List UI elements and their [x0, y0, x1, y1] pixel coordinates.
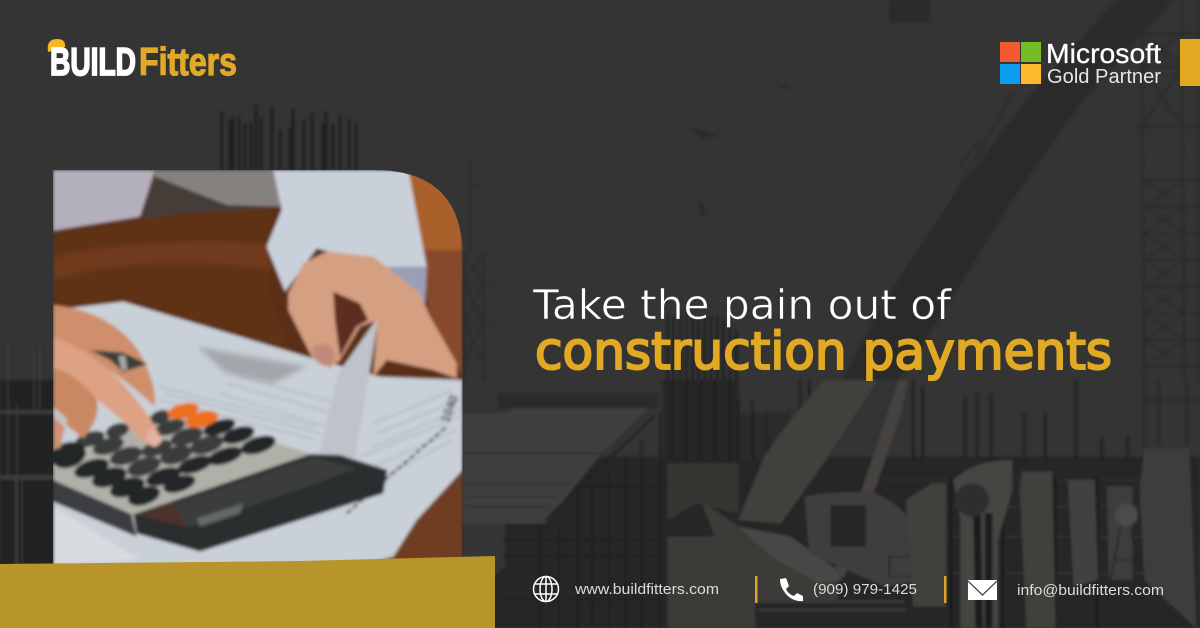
contact bar — [534, 576, 1164, 603]
turned page — [319, 317, 378, 458]
icon: Microsoft squares — [1000, 42, 1041, 84]
badge text: Gold Partner — [1047, 66, 1161, 88]
badge text: Microsoft — [1046, 38, 1161, 69]
left hand — [53, 305, 155, 407]
left building frame — [0, 340, 60, 565]
photo: hands using calculator over tax paperwork — [47, 170, 463, 580]
right lattice tower — [1135, 0, 1200, 380]
wrapped panels — [953, 460, 1012, 628]
heading: Take the pain out of — [532, 281, 953, 329]
paper stack — [53, 302, 463, 580]
rebar above photo — [222, 105, 356, 170]
shirt cuff right — [267, 170, 427, 303]
scaffolding — [502, 380, 1128, 628]
icon: envelope — [968, 580, 997, 600]
yellow band — [0, 556, 495, 628]
divider — [944, 576, 946, 603]
left tower — [460, 163, 495, 380]
calculator keys — [73, 408, 226, 480]
calculator screen — [167, 457, 357, 527]
email: info@buildfitters.com — [1017, 583, 1164, 599]
yellow corner tab — [1180, 39, 1200, 86]
lower site: slab, scaffolding, crane and panels — [460, 380, 1200, 628]
icon: globe — [534, 576, 558, 602]
logo hard hat — [48, 39, 65, 52]
icon: phone — [780, 578, 803, 601]
badge text — [1046, 38, 1161, 88]
concrete slab — [462, 408, 649, 523]
logo wordmark: BUILD — [50, 41, 136, 84]
phone number: (909) 979-1425 — [813, 582, 917, 598]
orange keys — [166, 400, 220, 431]
logo: BuildFitters — [48, 39, 237, 84]
wooden desk — [120, 174, 462, 559]
background sleeve left — [53, 170, 155, 231]
crane body — [668, 500, 838, 628]
pen — [90, 350, 147, 372]
crane boom lower section — [738, 380, 878, 523]
photo: hands using calculator over tax paperwork: 1040 — [438, 393, 461, 424]
rear building columns — [833, 460, 1200, 613]
calculator case — [53, 408, 310, 515]
sky details: crane boom, towers and jib — [460, 0, 1200, 380]
heading — [532, 281, 1112, 382]
right hand — [288, 252, 457, 378]
logo: BuildFitters: Fitters — [139, 41, 237, 84]
heading: construction payments — [535, 322, 1112, 382]
website: www.buildfitters.com — [574, 582, 719, 598]
desk foreground — [394, 474, 462, 558]
divider — [755, 576, 758, 603]
Microsoft Gold Partner badge — [1000, 38, 1161, 88]
form rows — [162, 384, 458, 475]
